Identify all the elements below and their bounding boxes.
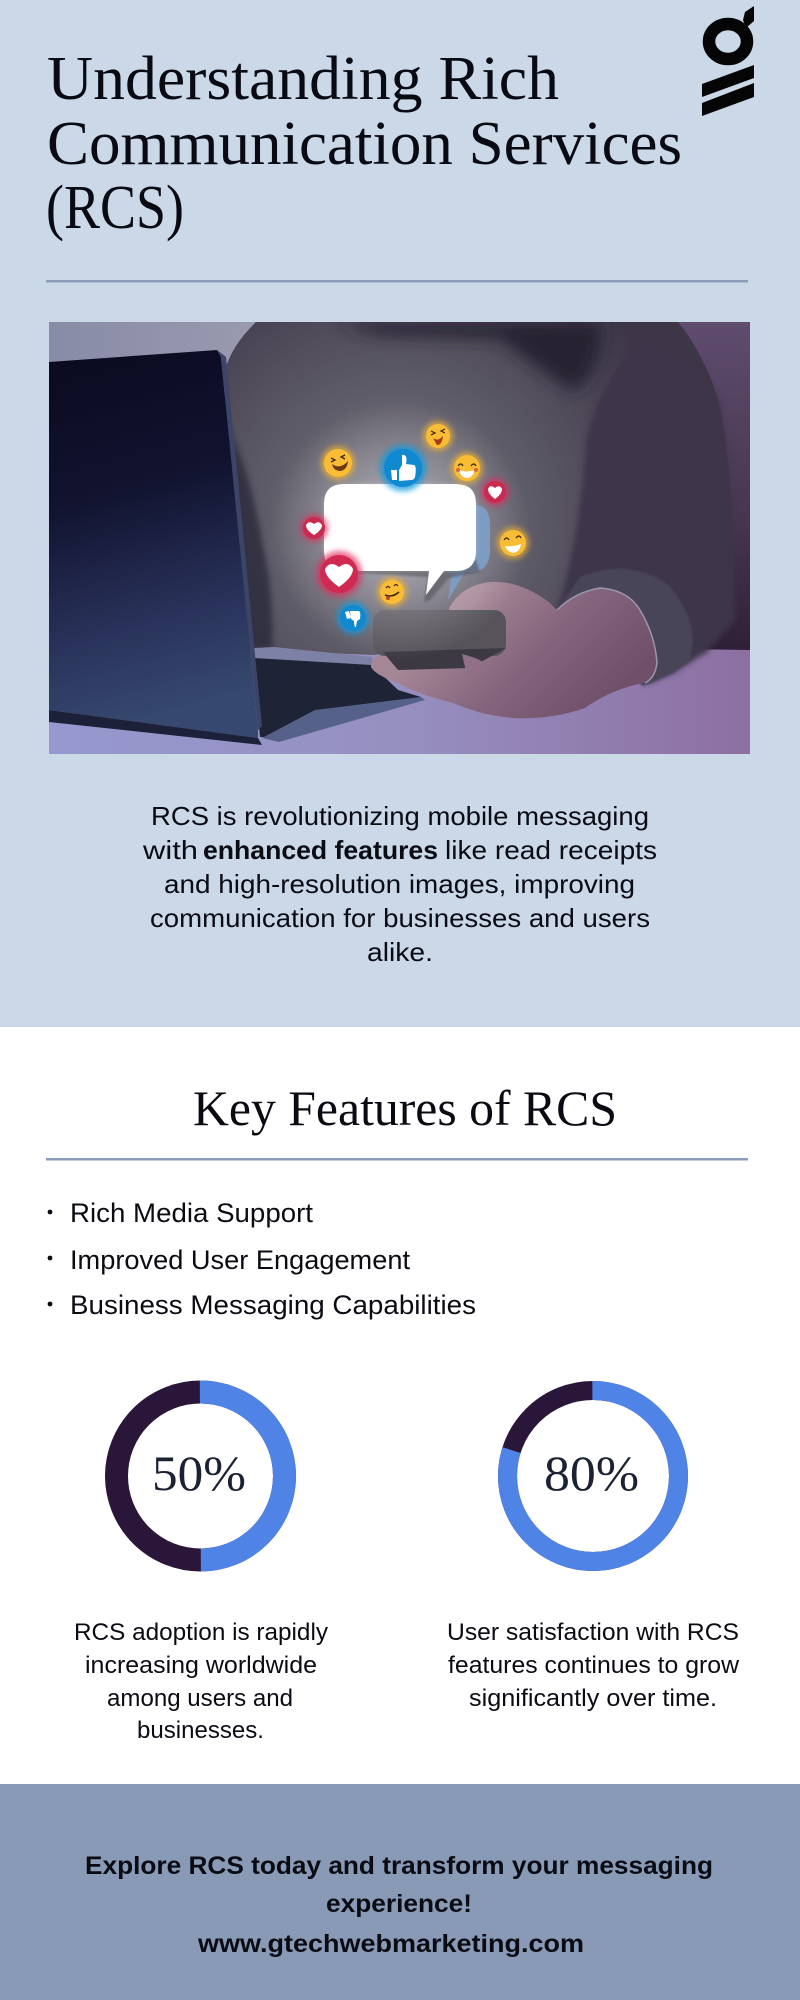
bullet list: Business Messaging Capabilities <box>70 1290 476 1320</box>
donut chart: 50%: 50% <box>152 1445 246 1501</box>
caption: adoption: RCS adoption is rapidly <box>74 1619 328 1646</box>
icon: big heart <box>316 551 362 597</box>
bullet list: Rich Media Support <box>70 1198 314 1228</box>
donut chart: 50% <box>116 1392 284 1560</box>
emoji smile <box>451 452 483 484</box>
emoji sweat laugh <box>497 527 529 559</box>
hero photo: person holding phone beside laptop <box>49 322 750 754</box>
phone <box>373 610 506 656</box>
intro paragraph: alike. <box>367 937 433 967</box>
title: Understanding Rich <box>47 45 559 113</box>
panel: header background <box>0 0 800 1027</box>
intro paragraph: and high-resolution images, improving <box>164 869 635 899</box>
donut chart: 80%: 80% <box>544 1445 639 1501</box>
hair shadow <box>335 322 601 392</box>
table <box>49 640 750 754</box>
arm shadow beside laptop <box>230 434 275 652</box>
hand <box>371 582 657 718</box>
icon: small heart right <box>481 478 509 506</box>
notebook <box>253 647 372 665</box>
intro paragraph: RCS is revolutionizing mobile messaging <box>151 801 649 831</box>
caption: satisfaction <box>447 1619 740 1712</box>
bullet list: Improved User Engagement <box>70 1245 411 1275</box>
caption: satisfaction: significantly over time. <box>469 1685 717 1712</box>
caption: satisfaction: User satisfaction with RCS <box>447 1619 739 1646</box>
title: Communication Services <box>47 110 682 178</box>
title: (RCS) <box>46 174 184 242</box>
cuff stitching <box>557 588 657 683</box>
intro paragraph: like read receipts <box>445 835 657 865</box>
laptop base <box>253 658 421 737</box>
intro paragraph: with <box>142 835 198 865</box>
icon: small heart left <box>300 514 328 542</box>
emoji wink <box>423 421 453 451</box>
sleeve <box>557 340 735 684</box>
call to action: Explore RCS today and transform your messaging <box>85 1852 713 1880</box>
cuff <box>557 569 693 686</box>
icon: thumbs up <box>380 445 426 491</box>
icon: brand logo <box>702 6 754 116</box>
call to action <box>85 1852 713 1958</box>
call to action: experience! <box>326 1890 472 1918</box>
emoji laugh <box>321 446 355 480</box>
intro paragraph: communication for businesses and users <box>150 903 650 933</box>
caption: adoption: increasing worldwide <box>85 1652 317 1679</box>
donut chart: 80% <box>508 1390 678 1562</box>
panel: features background <box>0 1027 800 1784</box>
caption: adoption: among users and <box>107 1685 293 1712</box>
caption: adoption <box>74 1619 328 1744</box>
call to action: www.gtechwebmarketing.com <box>197 1930 584 1958</box>
icon: thumbs down <box>337 602 369 634</box>
title <box>46 45 682 242</box>
emoji tongue <box>377 577 407 607</box>
sweater torso <box>225 322 733 655</box>
laptop lid <box>49 350 258 738</box>
heading: key features: Key Features of RCS <box>193 1080 617 1136</box>
intro paragraph: enhanced features <box>203 835 438 865</box>
caption: satisfaction: features continues to grow <box>448 1652 740 1679</box>
panel: footer background <box>0 1784 800 2000</box>
white bubble <box>324 484 476 595</box>
caption: adoption: businesses. <box>137 1717 264 1744</box>
intro paragraph <box>142 801 657 967</box>
bullet list <box>48 1198 476 1320</box>
glow <box>284 414 516 647</box>
